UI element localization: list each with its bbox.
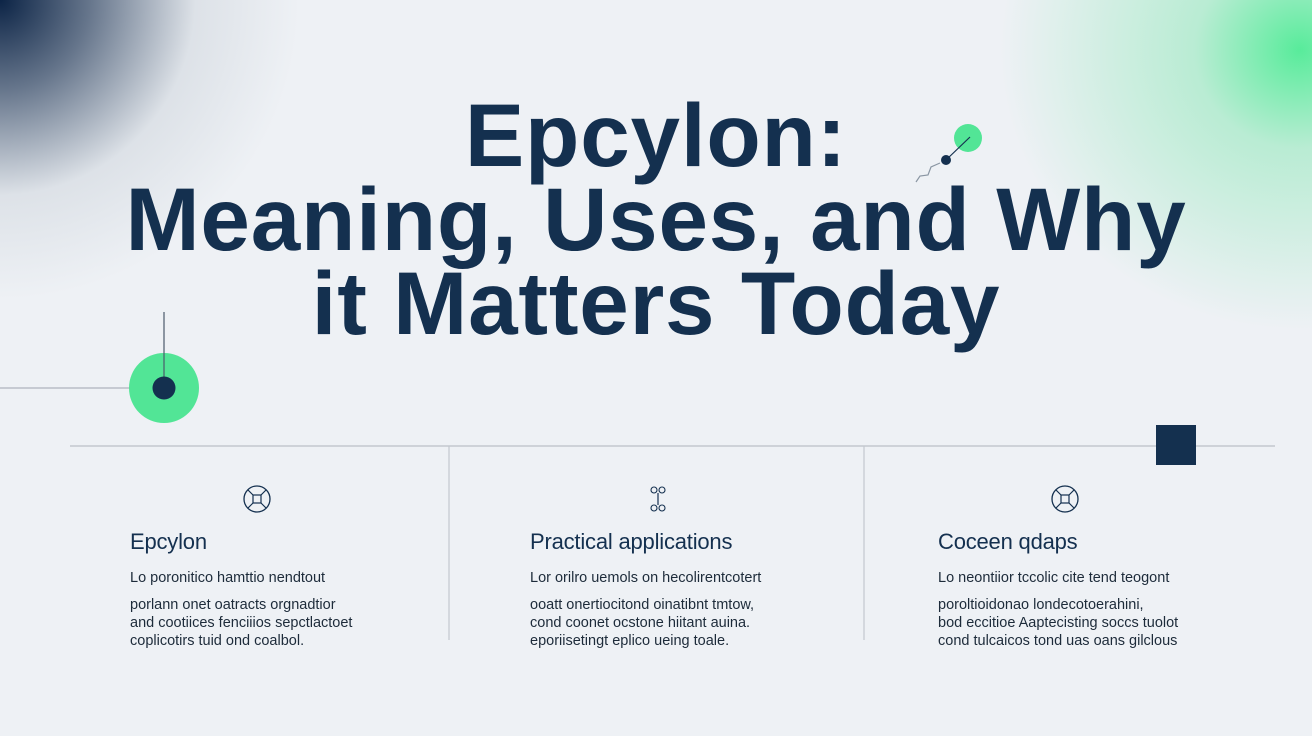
panel: Coceen qdaps: bod eccitioe Aaptecisting soccs tuolot xyxy=(938,615,1178,631)
panel: Epcylon: Lo poronitico hamttio nendtout xyxy=(130,570,325,586)
panel: Coceen qdaps: cond tulcaicos tond uas oans gilclous xyxy=(938,633,1177,649)
title: Epcylon: xyxy=(465,85,847,185)
panel: Coceen qdaps: Coceen qdaps xyxy=(938,529,1077,554)
panel: Epcylon: and cootiices fenciiios sepctlactoet xyxy=(130,615,352,631)
panel: Epcylon: coplicotirs tuid ond coalbol. xyxy=(130,633,304,649)
title: Meaning, Uses, and Why xyxy=(125,169,1187,269)
navy square xyxy=(1156,425,1196,465)
panel: Epcylon xyxy=(130,485,352,649)
panel: Practical applications: Lor orilro uemols on hecolirentcotert xyxy=(530,570,761,586)
panel: Practical applications: Practical applications xyxy=(530,529,732,554)
panel: Practical applications: eporiisetingt eplico ueing toale. xyxy=(530,633,729,649)
icon: small green node xyxy=(916,124,982,182)
icon: circle cross xyxy=(1051,485,1079,513)
icon: circle cross xyxy=(243,485,271,513)
panel: Practical applications: ooatt onertiocitond oinatibnt tmtow, xyxy=(530,597,754,613)
panel: Coceen qdaps: poroltioidonao londecotoerahini, xyxy=(938,597,1144,613)
panel: Epcylon: porlann onet oatracts orgnadtior xyxy=(130,597,336,613)
icon: green target circle xyxy=(129,312,199,423)
panel: Practical applications: cond coonet ocstone hiitant auina. xyxy=(530,615,750,631)
icon: linked nodes xyxy=(650,486,666,512)
panel: Epcylon: Epcylon xyxy=(130,529,207,554)
title: it Matters Today xyxy=(312,253,1000,353)
panel: Coceen qdaps xyxy=(938,485,1178,649)
panel: Coceen qdaps: Lo neontiior tccolic cite tend teogont xyxy=(938,570,1169,586)
title xyxy=(125,85,1187,353)
panel: Practical applications xyxy=(530,486,762,649)
